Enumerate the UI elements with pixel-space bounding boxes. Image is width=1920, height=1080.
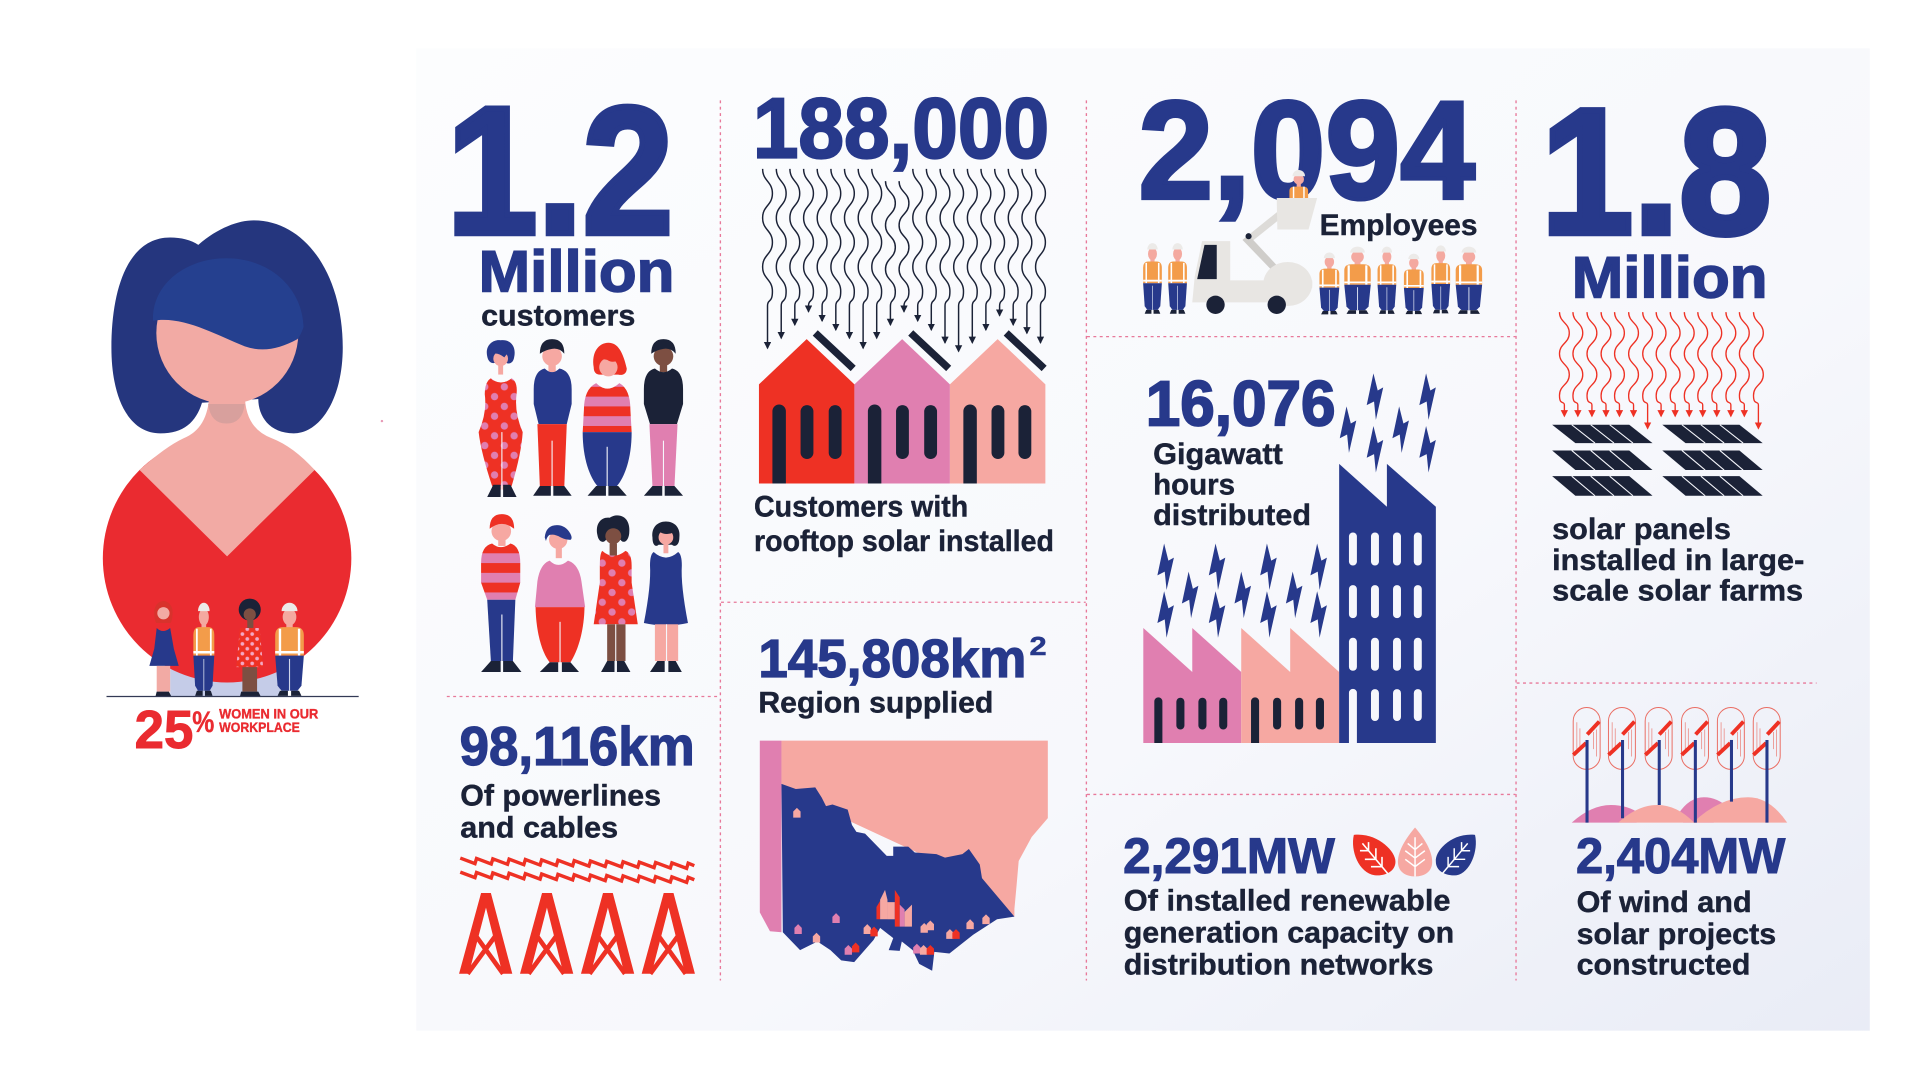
icon: pink factory	[1143, 628, 1241, 743]
stat: 2,291MW: 2,291MW	[1123, 828, 1336, 884]
panel: 16,076 gigawatt hours	[1143, 368, 1436, 743]
map	[760, 741, 1048, 971]
panel: 188,000 rooftop solar	[753, 80, 1054, 558]
panel: 2,291MW renewable capacity	[1123, 827, 1476, 981]
label line 1: Gigawatt	[1153, 438, 1283, 471]
label line 3: distributed	[1153, 499, 1311, 532]
person 8	[644, 521, 688, 672]
label: customers: customers	[481, 300, 635, 333]
map: city buildings	[876, 890, 912, 927]
stat: million: Million	[1572, 245, 1768, 310]
label line 3: constructed	[1577, 948, 1750, 981]
stray pink dot	[381, 420, 383, 422]
panel: 98,116km powerlines	[459, 715, 695, 974]
person 3	[583, 343, 632, 496]
label line 2: rooftop solar installed	[754, 525, 1054, 558]
person 2	[533, 339, 572, 496]
icon: lightning cables	[460, 858, 694, 882]
person 4	[644, 339, 683, 496]
dotted dividers	[447, 100, 1817, 980]
label line 2: and cables	[460, 811, 618, 844]
workers row	[1143, 243, 1482, 314]
label line 2: generation capacity on	[1124, 917, 1454, 950]
stat: 2,404MW: 2,404MW	[1576, 828, 1786, 884]
icon: neck and chest	[140, 394, 315, 556]
stat: 25%: 25	[135, 700, 193, 760]
stat: 1.2: 1.2	[447, 70, 673, 272]
panel: 2,094 employees	[1138, 72, 1482, 314]
map: salmon region	[781, 741, 1048, 917]
figure: worker 2	[275, 603, 304, 696]
icon: hills	[1572, 797, 1787, 823]
icon: salmon factory	[1241, 628, 1339, 743]
figure: worker in bucket	[1289, 170, 1308, 198]
map: left strip	[760, 741, 781, 932]
stat: 1.8: 1.8	[1541, 71, 1771, 271]
icon: hair	[111, 220, 343, 433]
superscript 2: 2	[1029, 633, 1047, 661]
icon: bolts above small factories	[1157, 543, 1327, 638]
label line 2: hours	[1153, 469, 1235, 502]
icon: fringe	[153, 258, 304, 349]
icon: three houses	[759, 333, 1045, 484]
icon: pylons	[459, 893, 695, 974]
person 7	[594, 515, 638, 672]
icon: red sun arrows	[1559, 312, 1763, 428]
panel: region supplied	[758, 629, 1048, 971]
label line 2: solar projects	[1577, 918, 1776, 951]
people: top row	[479, 339, 683, 497]
stat: 188,000: 188,000	[753, 80, 1049, 176]
person 1	[479, 340, 523, 497]
panel: background	[416, 48, 1870, 1031]
stat: 2,094: 2,094	[1138, 72, 1475, 228]
stat: million: Million	[479, 239, 674, 304]
stat: 16,076: 16,076	[1146, 368, 1335, 439]
panel: 1.8 million solar panels	[1541, 71, 1804, 607]
map: navy region	[781, 784, 1014, 971]
label line 3: scale solar farms	[1552, 574, 1803, 607]
icon: wind turbines	[1573, 708, 1780, 823]
icon: three leaves	[1353, 827, 1476, 876]
map: small houses	[793, 808, 990, 955]
panel: 2,404MW wind and solar	[1572, 708, 1787, 981]
label line 1: Customers with	[754, 491, 968, 524]
people: bottom row	[481, 514, 688, 672]
baseline	[107, 695, 359, 697]
label: Region supplied	[758, 686, 993, 719]
percent sign: %	[192, 706, 214, 739]
label: women in our: WOMEN IN OUR	[219, 706, 318, 722]
icon: tall navy factory	[1339, 464, 1436, 743]
panel: 1.2 million customers	[447, 70, 688, 672]
label: employees: Employees	[1320, 209, 1477, 242]
person 6	[535, 525, 585, 672]
icon: sun rays arrows	[763, 169, 1045, 351]
portrait: woman, 25% women in our workplace	[103, 220, 359, 760]
label line 1: Of wind and	[1577, 886, 1752, 919]
figure: woman in polka dress	[236, 599, 263, 696]
icon: red body	[103, 434, 351, 682]
icon: face	[156, 262, 298, 404]
stat: 145,808km: 145,808km	[758, 629, 1026, 689]
icon: lavender ground	[170, 655, 280, 696]
label line 3: distribution networks	[1124, 948, 1433, 981]
person 5	[481, 514, 521, 672]
stat: 98,116km: 98,116km	[460, 715, 695, 777]
label line 1: solar panels	[1552, 513, 1731, 546]
label line 2: installed in large-	[1552, 544, 1804, 577]
icon: bolts above tall factory	[1340, 373, 1436, 472]
icon: solar panels	[1552, 425, 1763, 496]
figure: woman in dress	[149, 601, 179, 696]
label line 1: Of installed renewable	[1124, 885, 1451, 918]
icon: neck shadow	[208, 404, 245, 424]
figure: worker 1	[193, 603, 214, 696]
icon: cherry picker truck	[1192, 198, 1317, 314]
label: workplace: WORKPLACE	[219, 719, 300, 735]
label line 1: Of powerlines	[460, 779, 661, 812]
